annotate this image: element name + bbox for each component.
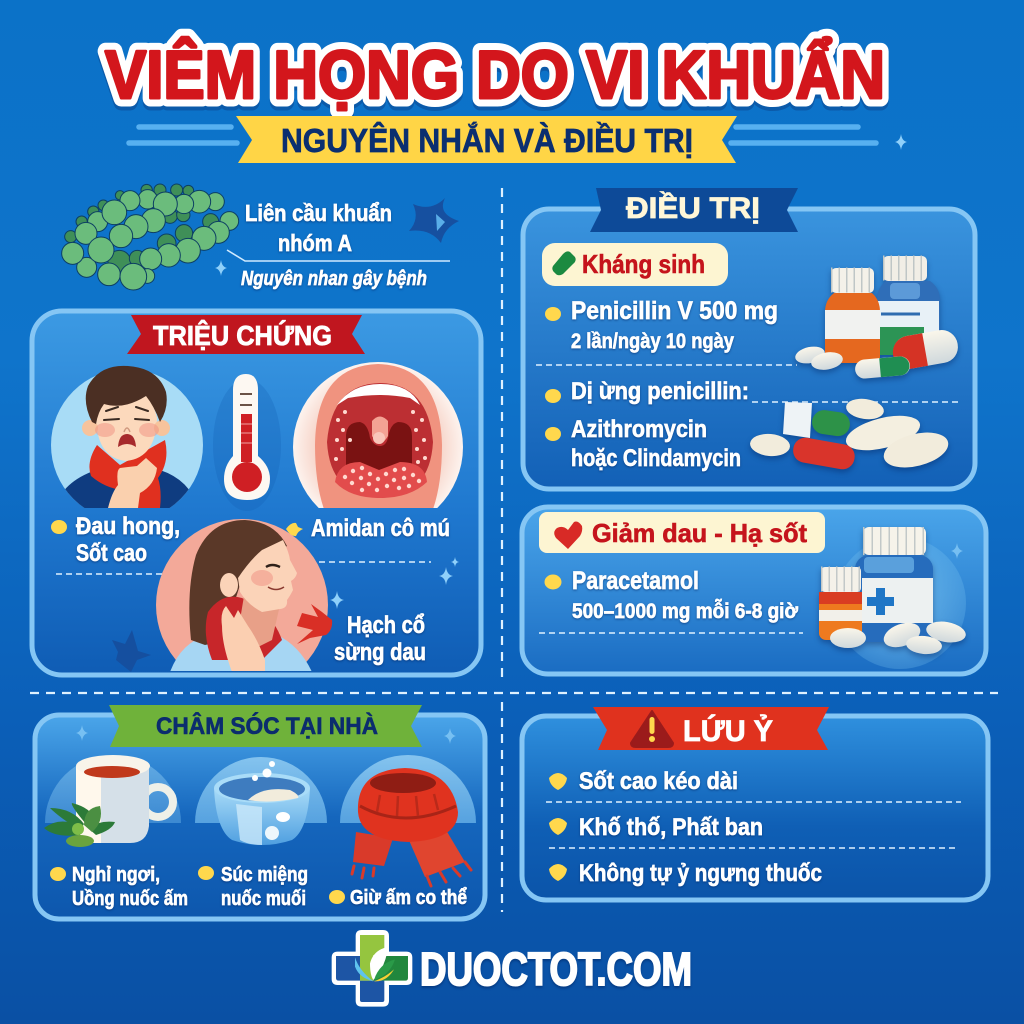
allergy entry: [545, 378, 958, 472]
panel: symptoms: [32, 311, 481, 691]
warning: prolonged fever: [546, 768, 961, 802]
bullet: sore throat and fever: Sốt cao: [76, 540, 147, 567]
paracetamol entry: Paracetamol: [572, 567, 699, 595]
sparkles: [330, 557, 459, 609]
icon: streptococcus chain: [62, 184, 239, 290]
bullet: rest and warm water: Nghỉ ngơi,: [72, 864, 160, 886]
sparkle: [895, 134, 907, 150]
sparkles: [76, 725, 456, 744]
panel: treatment antibiotics: [523, 188, 975, 489]
pain relief label: [539, 512, 825, 553]
bullet: salt water gargle: Súc miệng: [221, 864, 308, 886]
subtitle side lines: [129, 127, 876, 143]
warning: breathing and rash: Khố thố, Phất ban: [579, 814, 763, 841]
treatment ribbon: [590, 188, 798, 232]
title: VIÊM HỌNG DO VI KHUẨN: [105, 36, 885, 113]
panel: pain relief: [522, 507, 986, 674]
bullet: salt water gargle: [198, 864, 308, 910]
illustration: boy with sore throat: [51, 366, 203, 521]
decorative dark star: [112, 630, 151, 672]
bullet: rest and warm water: [50, 864, 188, 910]
decorative dark star: [409, 198, 459, 243]
penicillin entry: 2 lần/ngày 10 ngày: [571, 330, 734, 353]
logo: DUOCTOT.COM: [420, 943, 692, 995]
illustration: salt water bowl: [195, 757, 327, 845]
illustration: assorted pills: [749, 396, 952, 474]
home care ribbon: [109, 705, 422, 747]
illustration: red scarf: [340, 755, 476, 886]
icon: warning triangle: [631, 711, 673, 747]
antibiotics label: [542, 243, 728, 286]
home care ribbon: CHÂM SÓC TẠI NHÀ: [156, 712, 378, 740]
penicillin entry: [536, 297, 797, 365]
title: VIÊM HỌNG DO VI KHUẨN: [105, 40, 885, 117]
label: swollen neck nodes: Hạch cổ: [347, 612, 425, 639]
panel: warnings: [522, 707, 988, 900]
pathogen label: Liên cầu khuẩn: [245, 200, 392, 226]
logo: [332, 930, 692, 1007]
pathogen label: [227, 200, 450, 290]
warnings ribbon: [593, 707, 829, 750]
illustration: antibiotic bottles and capsules: [794, 256, 960, 379]
bullet: tonsils with pus: Amidan cô mú: [311, 515, 450, 542]
paracetamol entry: 500–1000 mg mỗi 6-8 giờ: [572, 599, 798, 623]
symptoms ribbon: TRIỆU CHỨNG: [153, 320, 332, 351]
penicillin entry: Penicillin V 500 mg: [571, 297, 778, 325]
pathogen label: nhóm A: [278, 230, 352, 256]
bullet: keep warm: Giừ ấm co thể: [350, 887, 467, 909]
symptoms ribbon: [127, 315, 365, 354]
bullet: salt water gargle: nuốc muối: [221, 888, 306, 910]
illustration: paracetamol bottles: [819, 527, 967, 669]
bullet: sore throat and fever: Đau hong,: [76, 513, 180, 540]
bullet: tonsils with pus: [286, 515, 450, 562]
pathogen label: Nguyên nhan gây bệnh: [241, 268, 427, 290]
subtitle banner: NGUYÊN NHẮN VÀ ĐIỀU TRỊ: [281, 122, 693, 159]
panel: home care: [35, 705, 485, 919]
warning: breathing and rash: [549, 814, 959, 848]
treatment ribbon: ĐIỀU TRỊ: [626, 191, 760, 225]
illustration: thermometer: [213, 374, 281, 511]
illustration: inflamed tonsils: [293, 362, 463, 508]
warning: do not stop medication: Không tự ỷ ngưng thuốc: [579, 860, 822, 887]
allergy entry: Azithromycin: [571, 416, 707, 443]
warnings ribbon: LỨU Ỷ: [683, 714, 773, 748]
paracetamol entry: [539, 567, 803, 633]
illustration: warm tea and herbs: [44, 755, 181, 847]
bullet: sore throat and fever: [51, 513, 180, 574]
allergy entry: hoặc Clindamycin: [571, 445, 741, 472]
section dividers: [30, 188, 998, 912]
logo cross: [332, 930, 412, 1007]
pain relief label: Giảm dau - Hạ sốt: [592, 518, 807, 548]
label: swollen neck nodes: sừng dau: [334, 639, 426, 666]
illustration: girl with swollen lymph nodes: [156, 519, 332, 671]
title: VIÊM HỌNG DO VI KHUẨN: [105, 36, 885, 113]
label: swollen neck nodes: [334, 612, 426, 666]
warning: prolonged fever: Sốt cao kéo dài: [579, 768, 738, 795]
bullet: rest and warm water: Uồng nuốc ấm: [72, 888, 188, 910]
sparkle: [215, 260, 227, 276]
antibiotics label: Kháng sinh: [582, 249, 705, 279]
allergy entry: Dị ừng penicillin:: [571, 378, 749, 405]
